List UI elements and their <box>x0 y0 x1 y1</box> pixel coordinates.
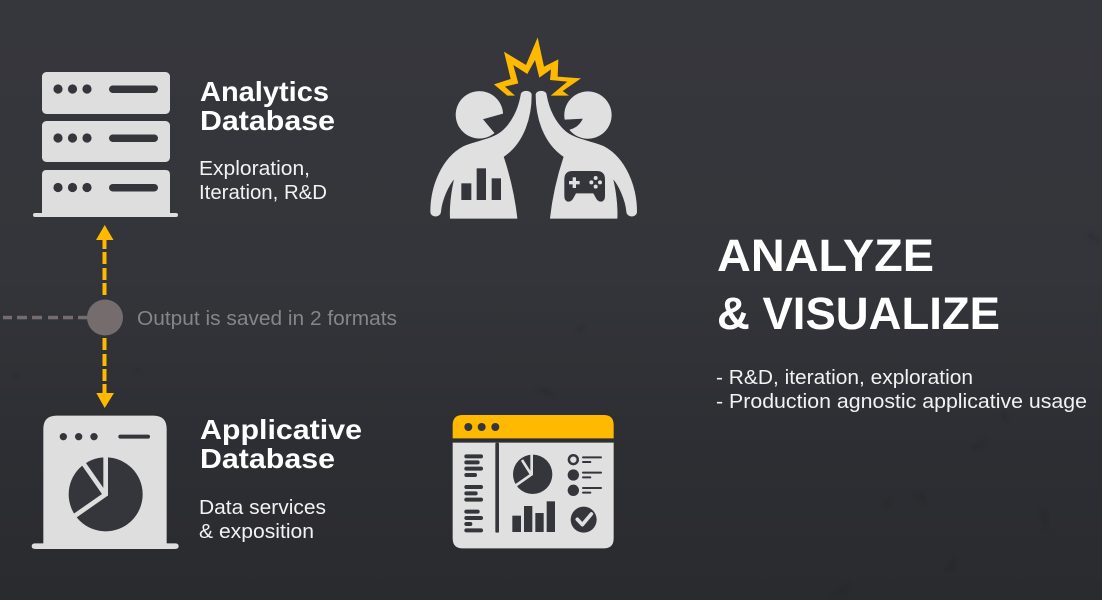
text: analytics database description: Exploration, <box>199 158 310 180</box>
node: split point circle <box>87 300 123 336</box>
heading: Analytics Database <box>200 76 335 136</box>
text: applicative database description: & exposition <box>199 521 314 543</box>
heading: Applicative Database <box>200 414 362 474</box>
icon: bar chart on shirt <box>461 168 501 200</box>
label: output is saved in 2 formats: Output is saved in 2 formats <box>137 308 397 330</box>
arrow: up to analytics database <box>96 225 114 295</box>
icon: dashboard window <box>453 415 614 548</box>
icon: analytics database server stack <box>33 72 178 217</box>
text: analytics database description: Iteration, R&D <box>199 182 327 204</box>
heading: Applicative Database: Database <box>200 443 335 474</box>
text: usage bullet list <box>716 367 1087 413</box>
text: applicative database description <box>199 497 326 543</box>
arrow: incoming grey dashed line <box>3 316 88 319</box>
pie chart slice gaps <box>75 455 106 516</box>
title: analyze and visualize <box>717 230 1000 339</box>
heading: Analytics Database: Analytics <box>200 76 329 107</box>
arrow: down to applicative database <box>96 338 114 408</box>
text: usage bullet list: - Production agnostic applicative usage <box>716 391 1087 413</box>
icon: gamepad on shirt <box>564 171 605 202</box>
icon: spark burst <box>494 37 581 96</box>
title: analyze and visualize: ANALYZE <box>717 230 934 281</box>
heading: Applicative Database: Applicative <box>200 414 362 445</box>
icon: two people high five <box>431 37 637 218</box>
text: analytics database description <box>199 158 327 204</box>
icon: right person <box>536 91 637 218</box>
heading: Analytics Database: Database <box>200 105 335 136</box>
dashboard body <box>453 443 614 548</box>
dashboard title bar <box>453 415 614 438</box>
title: analyze and visualize: & VISUALIZE <box>717 288 1000 339</box>
icon: applicative database window with pie chart <box>32 416 179 549</box>
text: applicative database description: Data services <box>199 497 326 519</box>
icon: left person <box>431 91 531 218</box>
text: usage bullet list: - R&D, iteration, exploration <box>716 367 973 389</box>
